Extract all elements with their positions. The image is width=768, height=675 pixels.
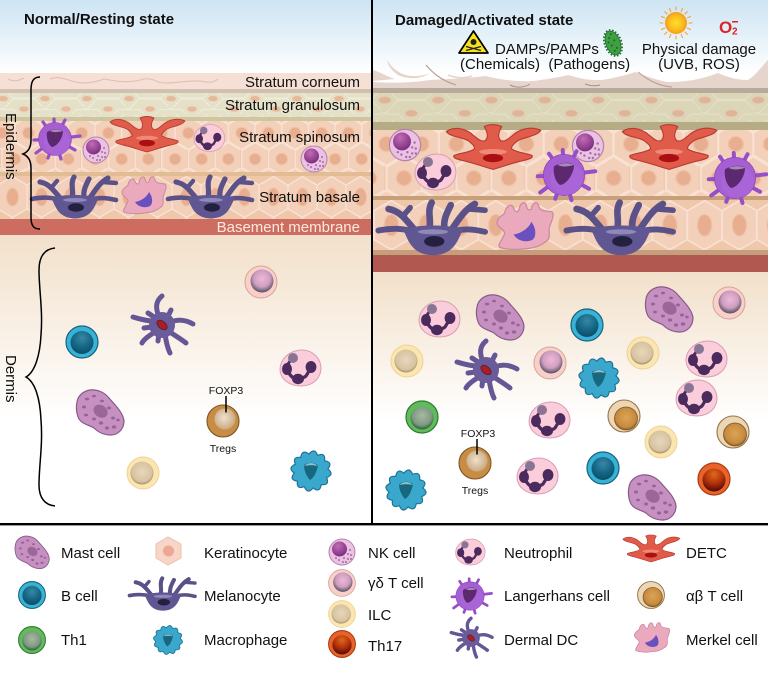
legend: gamma delta T cell: γδ T cell: [368, 575, 424, 592]
cell: NK: [389, 129, 421, 161]
legend: alpha beta T cell: [638, 582, 743, 608]
legend: keratinocyte: Keratinocyte: [204, 545, 287, 562]
cell: Tregs with FOXP3: FOXP3: [209, 385, 243, 397]
cell: neutrophil: [280, 350, 321, 386]
legend: [15, 535, 758, 657]
legend: macrophage: Macrophage: [204, 632, 287, 649]
icon: superoxide: O: [719, 18, 732, 37]
label: UVB ROS: (UVB, ROS): [658, 56, 740, 73]
legend: keratinocyte: [156, 537, 287, 565]
label: DAMPs/PAMPs: DAMPs/PAMPs: [495, 41, 599, 58]
cell: DETC: [446, 125, 541, 169]
cell: neutrophil: [194, 124, 225, 152]
icon: sun: [660, 7, 692, 39]
legend: alpha beta T cell: αβ T cell: [686, 588, 743, 605]
cell: mast: [76, 390, 124, 435]
legend: DETC: DETC: [686, 545, 727, 562]
sky background: [373, 0, 768, 74]
legend: melanocyte: [129, 578, 281, 611]
label: epidermis: Epidermis: [2, 113, 19, 180]
panel divider: [0, 0, 768, 525]
cell: Merkel: [497, 203, 553, 249]
legend: dermal DC: [451, 618, 578, 657]
legend: neutrophil: [456, 539, 572, 565]
legend: Th17: [329, 631, 402, 657]
legend: gamma delta T cell: [329, 570, 424, 596]
cell: Langerhans: [538, 150, 595, 200]
dermis cells: [383, 287, 749, 520]
legend: macrophage: [152, 624, 287, 656]
layer: stratum basale: [373, 196, 768, 255]
label: stratum basale: Stratum basale: [259, 189, 360, 206]
cell: melanocyte: [32, 177, 116, 218]
dermis background: [0, 235, 371, 420]
legend: Th1: [19, 627, 87, 653]
label: basement membrane: Basement membrane: [217, 219, 360, 236]
legend: Langerhans cell: Langerhans cell: [504, 588, 610, 605]
cell: Tregs with FOXP3: [207, 385, 243, 455]
legend: melanocyte: Melanocyte: [204, 588, 281, 605]
label: stratum corneum: Stratum corneum: [245, 74, 360, 91]
cell: Tregs with FOXP3: [459, 428, 495, 497]
brace: epidermis: [23, 77, 40, 229]
layer: basement membrane: [373, 255, 768, 272]
layer: basement membrane: [0, 219, 371, 235]
cell: Merkel: [122, 177, 166, 214]
label: stratum spinosum: Stratum spinosum: [239, 129, 360, 146]
icon: superoxide: 2: [732, 26, 738, 38]
layer: stratum granulosum: [373, 88, 768, 130]
legend: B cell: B cell: [61, 588, 98, 605]
cell: ILC: [127, 457, 159, 489]
label: dermis: Dermis: [2, 355, 19, 402]
heading: normal state: Normal/Resting state: [24, 11, 174, 28]
cell: gamma delta T: [245, 266, 277, 298]
heading: damaged state: Damaged/Activated state: [395, 12, 573, 29]
cell: Tregs with FOXP3: Tregs: [210, 443, 236, 455]
cell: Langerhans: [34, 119, 80, 159]
legend: Merkel cell: Merkel cell: [686, 632, 758, 649]
cell: dermal DC: [133, 296, 193, 353]
legend: Th17: Th17: [368, 638, 402, 655]
cell: NK: [83, 137, 109, 163]
legend: Merkel cell: [634, 623, 758, 652]
legend: NK cell: NK cell: [368, 545, 416, 562]
cell: melanocyte: [378, 203, 485, 255]
label: stratum granulosum: Stratum granulosum: [225, 97, 360, 114]
legend: dermal DC: Dermal DC: [504, 632, 578, 649]
layer: stratum granulosum: [0, 93, 371, 121]
icon: superoxide: [719, 18, 738, 38]
icon: chemical hazard: [459, 31, 488, 53]
legend: ILC: [329, 601, 392, 627]
cell: B: [66, 326, 98, 358]
icon: pathogen: [600, 27, 626, 59]
cell: NK: [572, 130, 604, 162]
cell: Tregs with FOXP3: Tregs: [462, 485, 488, 497]
legend: B cell: [19, 582, 98, 608]
cell: NK: [301, 146, 327, 172]
cell: DETC: [622, 125, 717, 169]
cell: Tregs with FOXP3: FOXP3: [461, 428, 495, 440]
layer: stratum corneum damaged: [373, 60, 768, 88]
legend: NK cell: [329, 539, 416, 565]
layer: stratum corneum: [0, 73, 371, 93]
cell: melanocyte: [566, 203, 673, 255]
legend: DETC: [623, 535, 727, 562]
sky background: [0, 0, 371, 74]
cell: Langerhans: [709, 153, 766, 203]
panel: normal resting state: [0, 0, 371, 506]
layer: stratum basale: [0, 172, 371, 219]
label: physical damage: Physical damage: [642, 41, 756, 58]
cell: DETC: [110, 116, 185, 152]
legend: mast cell: Mast cell: [61, 545, 120, 562]
label: chemicals and pathogens: (Chemicals) (Pathogens): [460, 56, 630, 73]
cell: melanocyte: [168, 177, 252, 218]
cell: neutrophil: [415, 154, 456, 190]
legend: Th1: Th1: [61, 632, 87, 649]
legend: Langerhans cell: [452, 579, 610, 613]
brace: dermis: [26, 248, 55, 506]
cell: macrophage: [288, 448, 334, 494]
dermis background: [373, 272, 768, 422]
layer: stratum spinosum: [373, 130, 768, 196]
legend: ILC: ILC: [368, 607, 392, 624]
legend: mast cell: [15, 536, 120, 569]
panel: damaged activated state: [373, 0, 768, 520]
legend: neutrophil: Neutrophil: [504, 545, 572, 562]
layer: stratum spinosum: [0, 121, 371, 172]
